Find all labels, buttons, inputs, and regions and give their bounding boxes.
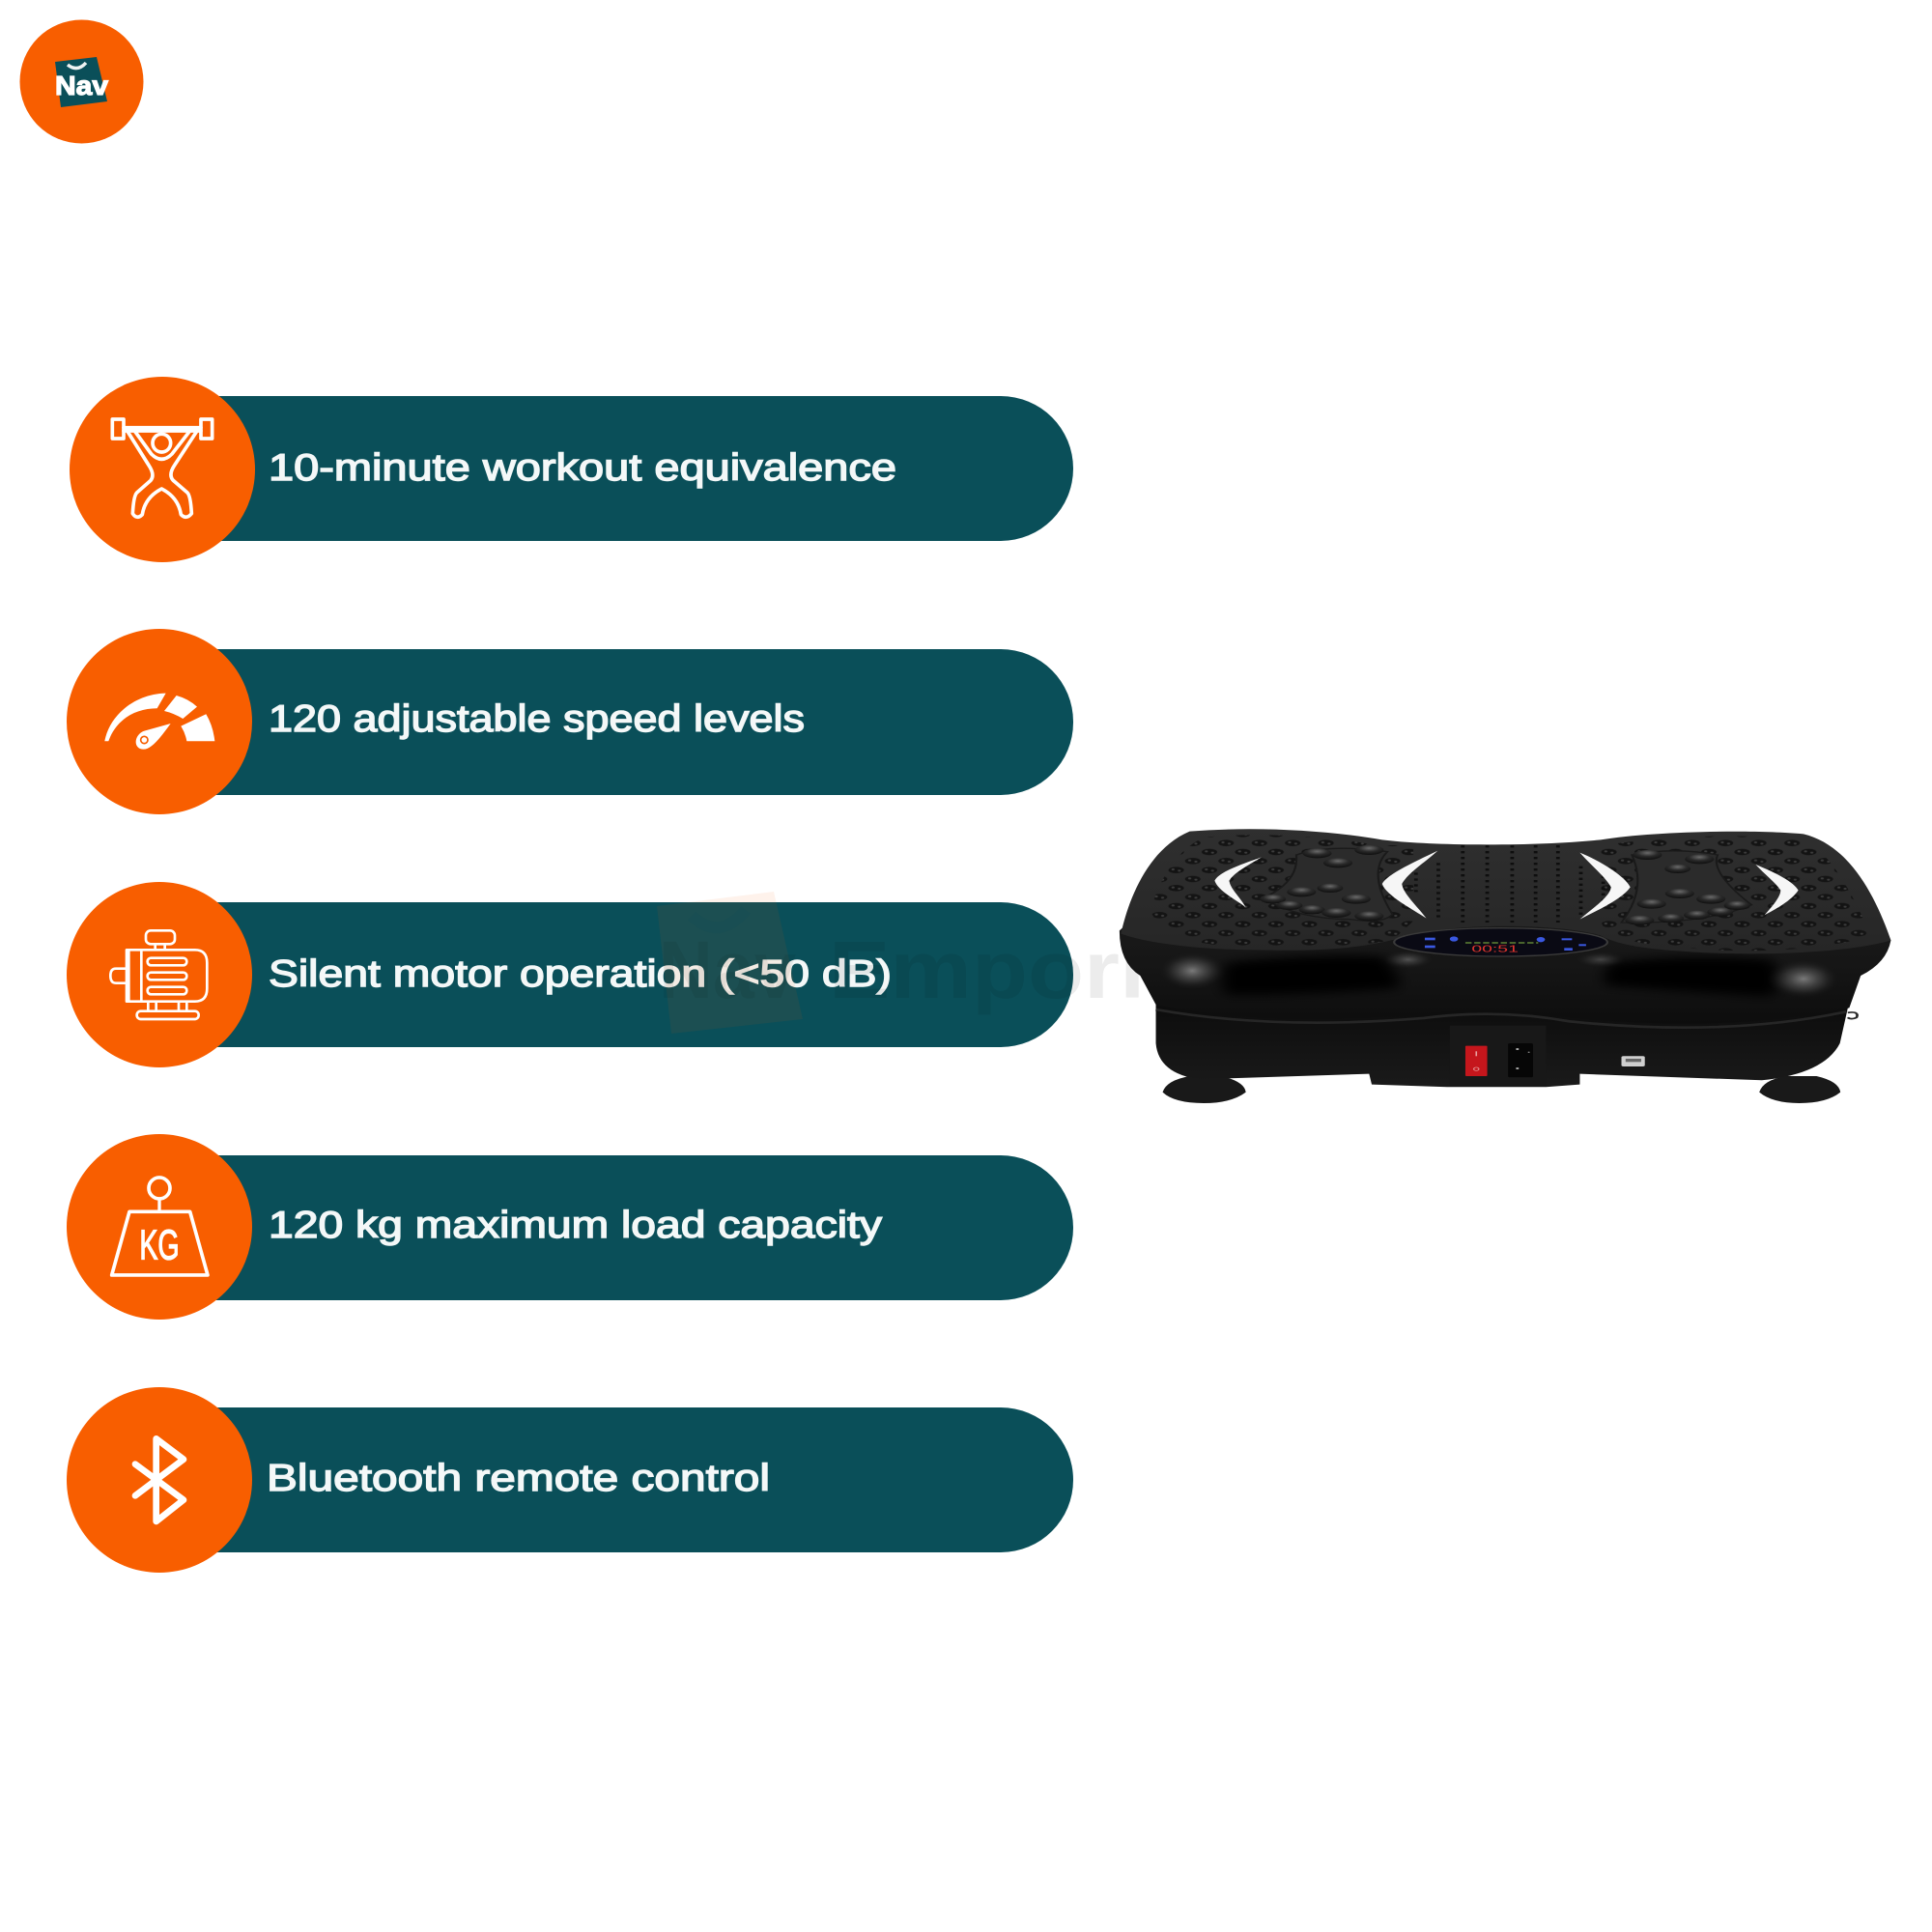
control panel: [1450, 1026, 1645, 1087]
label: Silent motor operation (<50 dB): [269, 953, 892, 995]
icon: electric motor: [110, 930, 207, 1019]
top plate: [1121, 829, 1890, 953]
label: 10-minute workout equivalence: [269, 447, 896, 489]
feet: [1163, 1076, 1840, 1103]
feature bar 4: [67, 1134, 1073, 1320]
label: 120 kg maximum load capacity: [269, 1205, 883, 1246]
massage texture: [1151, 835, 1871, 951]
feature bar 3: [67, 882, 1073, 1067]
pebbles: [1260, 845, 1750, 925]
watermark: Nav: [659, 924, 796, 1015]
product: vibration plate: [1120, 829, 1890, 1103]
label: Bluetooth remote control: [267, 1458, 770, 1499]
watermark: Emporium: [829, 924, 1283, 1015]
feature bar 1: [70, 377, 1073, 562]
icon: speedometer: [104, 694, 214, 750]
icon: kg weight: KG: [139, 1222, 180, 1268]
watermark: [657, 892, 1283, 1034]
center strip: [1416, 845, 1604, 923]
body shadows: [1222, 955, 1777, 997]
side knob: [1848, 1012, 1858, 1019]
icon: bluetooth: [135, 1438, 184, 1521]
feature bar 2: [67, 629, 1073, 814]
base housing: [1156, 1002, 1849, 1087]
feature bar 5: [67, 1387, 1073, 1573]
highlights: [1158, 950, 1840, 999]
label: 120 adjustable speed levels: [269, 698, 805, 740]
glossy mid body: [1120, 876, 1890, 1024]
logo badge: [19, 19, 143, 143]
display: [1394, 928, 1607, 956]
icon: weightlifter: [112, 419, 213, 517]
display: 00:51: [1471, 943, 1519, 954]
icon: kg weight: [112, 1178, 208, 1275]
logo badge: Nav: [55, 71, 108, 100]
chevrons: [1214, 851, 1799, 920]
foot outlines: [1263, 848, 1751, 923]
